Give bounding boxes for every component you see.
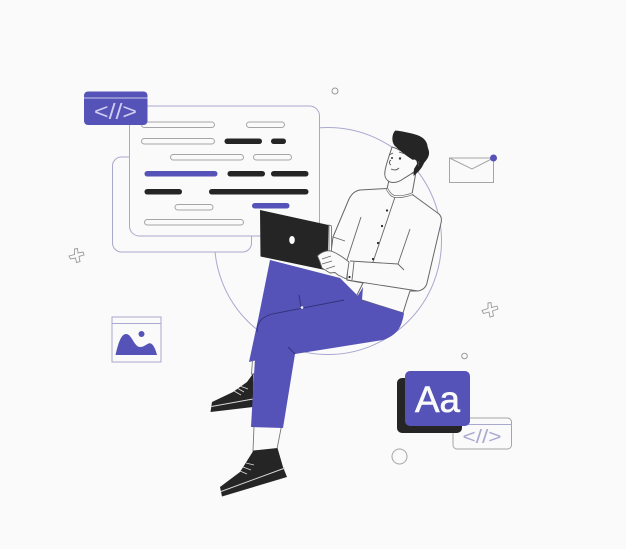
face details: [389, 152, 419, 170]
icon: outlined code window: [453, 418, 512, 449]
front leg trousers: [251, 287, 404, 428]
small circle bottom right: [462, 353, 467, 359]
icon: purple code tab: <//>: [94, 99, 137, 124]
icon: image card: [112, 317, 161, 362]
small circle top: [332, 88, 338, 94]
icon: outlined code window: <//>: [462, 427, 502, 448]
icon: typography card: Aa: [415, 378, 460, 420]
front shoe: [220, 448, 287, 496]
trouser fold lines: [257, 295, 344, 354]
collar: [387, 189, 413, 197]
shirt buttons: [348, 209, 388, 278]
front sock: [253, 426, 282, 451]
icon: plus left: [69, 248, 84, 262]
laptop: [260, 210, 332, 270]
panel: back window: [112, 157, 252, 252]
back leg trousers: [249, 260, 362, 362]
person: [210, 130, 441, 496]
back shoe: [210, 373, 254, 412]
icon: typography card: [397, 371, 470, 433]
background circle: [214, 128, 442, 354]
large circle bottom: [392, 449, 407, 464]
neck and face: [385, 147, 423, 197]
hand: [318, 251, 349, 279]
hair: [392, 130, 429, 176]
icon: plus right: [482, 302, 498, 317]
back sock: [252, 360, 257, 374]
shirt seams: [333, 197, 418, 291]
panel: code window: [130, 106, 320, 236]
shirt: [331, 188, 441, 313]
icon: purple code tab: [84, 92, 148, 125]
icon: envelope: [450, 154, 497, 182]
